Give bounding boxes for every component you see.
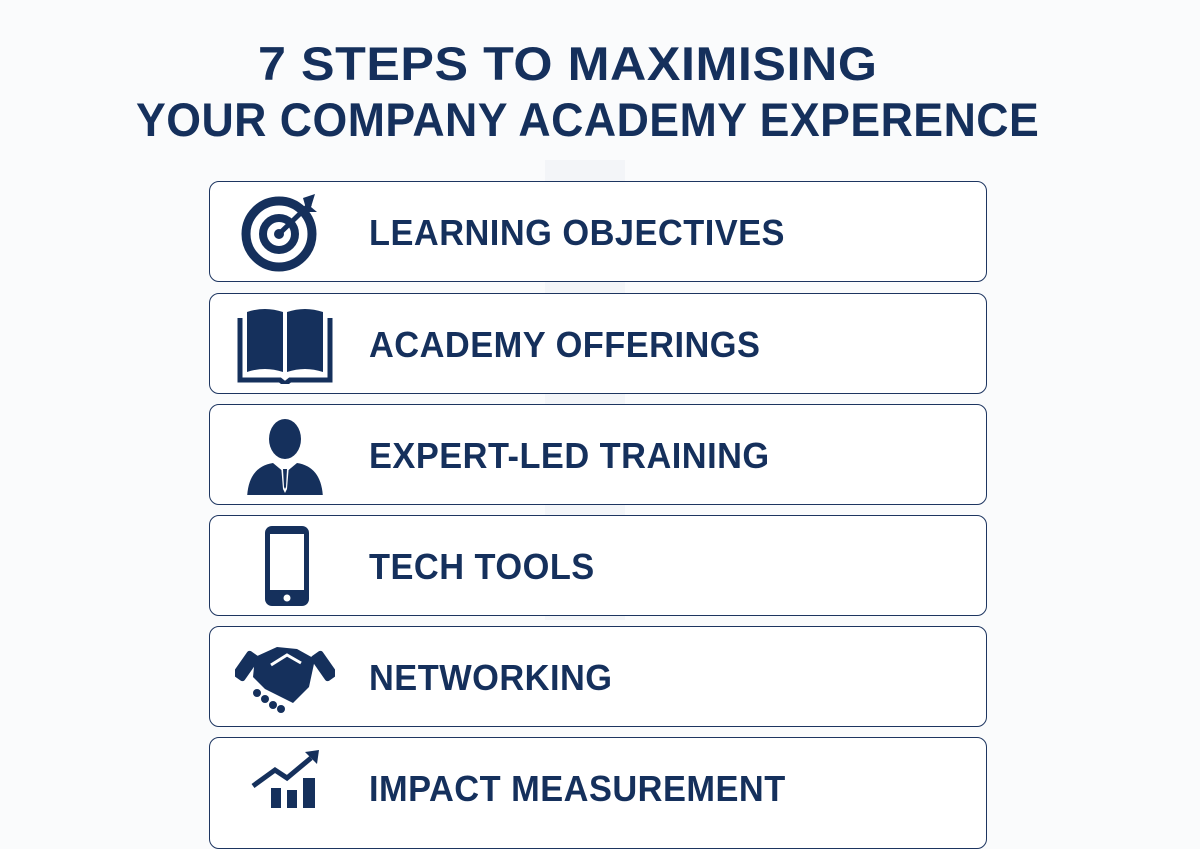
- icon: book: [238, 309, 332, 384]
- icon: handshake: [235, 647, 335, 713]
- icon: target: [242, 194, 317, 272]
- panel: academy offerings: [209, 293, 987, 394]
- title: 7 STEPS TO MAXIMISING: [258, 37, 877, 90]
- panel: tech tools: [209, 515, 987, 616]
- panel: academy offerings: ACADEMY OFFERINGS: [369, 324, 760, 365]
- panel: expert-led training: [209, 404, 987, 505]
- panel: expert-led training: EXPERT-LED TRAINING: [369, 435, 770, 476]
- icon: chart: [252, 750, 319, 808]
- panel: tech tools: TECH TOOLS: [369, 546, 595, 587]
- panel: impact measurement: [209, 737, 987, 849]
- icon: phone: [265, 526, 309, 606]
- panel: networking: NETWORKING: [369, 657, 613, 698]
- panel: learning objectives: [209, 181, 987, 282]
- panel: networking: [209, 626, 987, 727]
- panel: impact measurement: IMPACT MEASUREMENT: [369, 768, 786, 809]
- title: [136, 37, 1039, 146]
- panel: learning objectives: LEARNING OBJECTIVES: [369, 212, 785, 253]
- title: YOUR COMPANY ACADEMY EXPERENCE: [136, 93, 1039, 146]
- icon: person: [247, 419, 323, 495]
